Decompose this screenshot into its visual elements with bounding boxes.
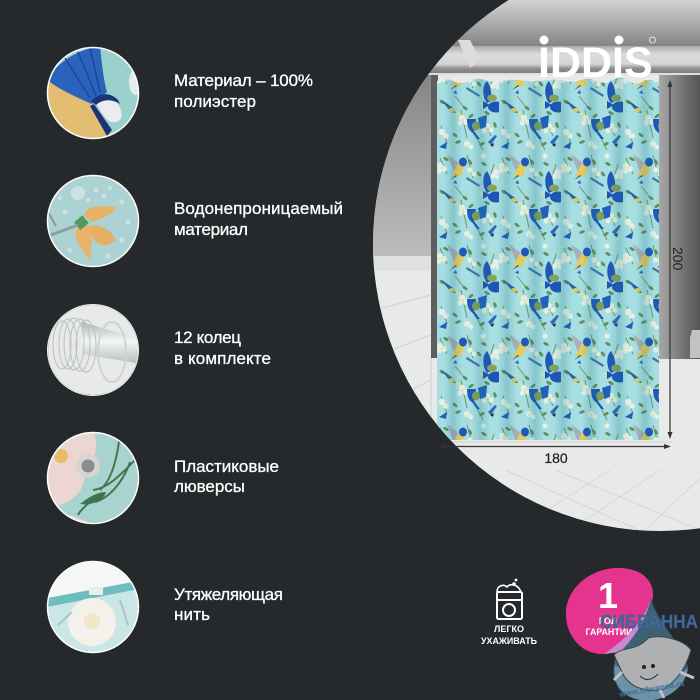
- label: Материал – 100%: [174, 71, 313, 90]
- warranty badge: ГАРАНТИИ: [586, 627, 633, 638]
- watermark: [600, 598, 698, 700]
- feature 5: нить: [174, 605, 210, 624]
- wordmark: СИБВАННА: [600, 612, 698, 632]
- mascot: [614, 637, 691, 690]
- feature 5: [47, 561, 283, 653]
- feature 4: [47, 432, 279, 524]
- warranty badge: 1: [598, 575, 618, 616]
- image: weighted hem: [47, 561, 139, 653]
- label: Водонепроницаемый: [174, 199, 343, 218]
- image: bird close-up: [47, 46, 143, 140]
- icon: washing machine: [497, 579, 522, 619]
- base white: [370, 0, 700, 540]
- tile seams: [375, 295, 672, 442]
- crown molding: [428, 40, 700, 75]
- upper wall: [450, 0, 700, 48]
- watermark: www.sibvanna.ru: [618, 679, 685, 699]
- feature 2: материал: [174, 220, 248, 239]
- feature 3: в комплекте: [174, 349, 271, 368]
- photo: bathroom with curtain: [370, 0, 700, 540]
- label: ЛЕГКО: [494, 624, 524, 634]
- label: Утяжеляющая: [174, 585, 283, 604]
- feature 1: полиэстер: [174, 92, 256, 111]
- floor seams: [505, 470, 700, 531]
- easy care block: УХАЖИВАТЬ: [481, 636, 538, 646]
- label: 12 колец: [174, 328, 241, 347]
- left wall: [370, 75, 432, 257]
- easy care block: [481, 579, 538, 646]
- logo: IDDIS: [538, 39, 653, 87]
- faucet: [690, 330, 700, 358]
- dimension: height: 200: [670, 247, 686, 271]
- image: rings on rod: [47, 304, 142, 396]
- dimension: height: [668, 80, 686, 439]
- image: water drops: [47, 175, 139, 267]
- dimension: width: [438, 444, 671, 466]
- drop: [614, 598, 688, 700]
- feature 4: люверсы: [174, 477, 245, 496]
- dark wall strip behind curtain: [431, 75, 438, 358]
- feature 3: [47, 304, 271, 396]
- dimension: width: 180: [544, 450, 568, 466]
- image: grommet on fabric: [47, 432, 140, 524]
- feature 2: [47, 175, 343, 267]
- curtain: [437, 76, 659, 442]
- right wall: [659, 75, 700, 359]
- label: Пластиковые: [174, 457, 279, 476]
- warranty badge: ГОД: [599, 616, 618, 626]
- baseboard: [370, 256, 431, 271]
- feature 1: [47, 46, 313, 140]
- warranty badge: [566, 568, 653, 654]
